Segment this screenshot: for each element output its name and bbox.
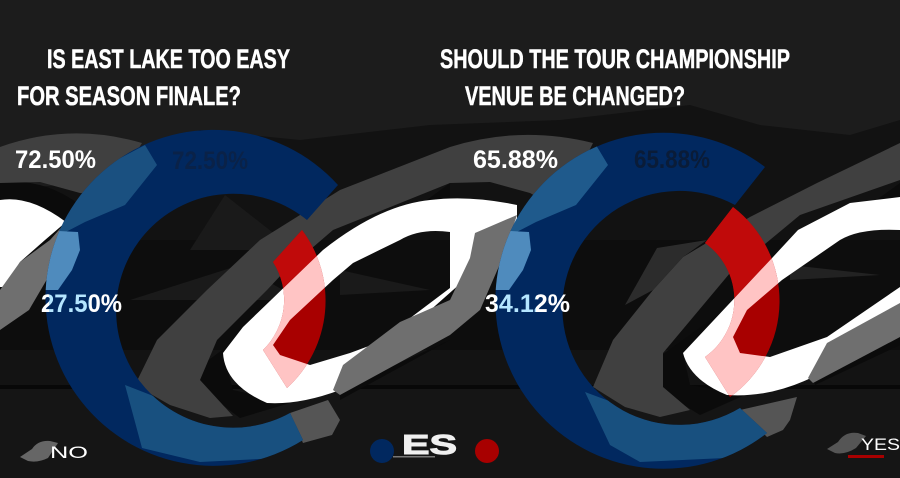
label 34.12%: 34.12% bbox=[485, 290, 570, 318]
title left line 2: FOR SEASON FINALE? bbox=[17, 81, 241, 111]
blue arc yes 65.88% bbox=[491, 133, 775, 469]
legend: no bbox=[20, 441, 88, 462]
grey ring end piece bbox=[290, 400, 340, 443]
legend dot: red bbox=[475, 439, 499, 463]
label 65.88% white: 65.88% bbox=[473, 146, 558, 174]
label 72.50% white: 72.50% bbox=[15, 146, 96, 174]
white inner ring bbox=[683, 197, 900, 395]
shadow bands bbox=[195, 183, 450, 418]
grey ring band bbox=[593, 143, 900, 417]
label 27.50%: 27.50% bbox=[41, 290, 122, 318]
white inner ring bbox=[223, 198, 517, 403]
legend: no: NO bbox=[50, 443, 88, 462]
grey ring end piece bbox=[740, 397, 797, 437]
logo: ES bbox=[402, 429, 457, 460]
light grey band bbox=[808, 303, 900, 383]
right chart bbox=[491, 133, 900, 469]
left edge continuation band bbox=[0, 133, 142, 330]
title right line 2: VENUE BE CHANGED? bbox=[465, 81, 685, 111]
legend dot: navy bbox=[370, 439, 394, 463]
label 65.88% dark: 65.88% bbox=[634, 146, 710, 174]
logo bbox=[393, 429, 457, 460]
shadow bands bbox=[655, 183, 900, 415]
legend: yes: YES bbox=[861, 435, 900, 454]
label 72.50% dark: 72.50% bbox=[172, 147, 248, 175]
legend: yes bbox=[827, 433, 900, 458]
red arc no 27.50% bbox=[263, 230, 326, 388]
title left line 1: IS EAST LAKE TOO EASY bbox=[47, 44, 290, 74]
grey ring shadow fragment bbox=[625, 240, 707, 305]
light grey band bbox=[333, 215, 517, 395]
red arc no 34.12% bbox=[705, 207, 780, 397]
grey ring band bbox=[135, 135, 593, 418]
blue arc yes 72.50% bbox=[40, 130, 338, 466]
left chart bbox=[40, 130, 593, 466]
